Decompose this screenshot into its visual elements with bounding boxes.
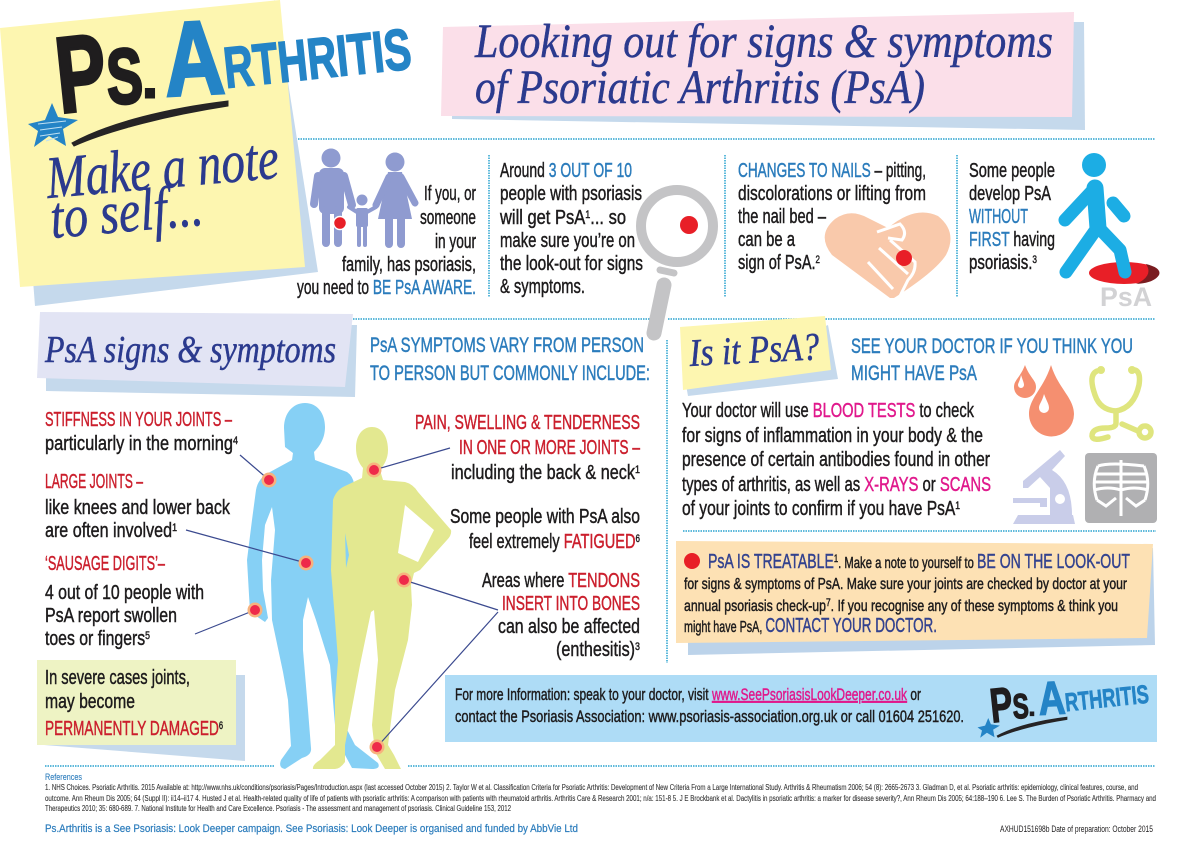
- text block: left symptoms: 4 out of 10 people with: [45, 582, 204, 604]
- text block: left symptoms: toes or fingers: [45, 628, 172, 650]
- logo: small Ps. Arthritis: S: [1012, 687, 1030, 726]
- callout: PsA is treatable: BE ON THE LOOK-OUT: [977, 551, 1130, 573]
- logo: Ps. Arthritis: S: [104, 31, 145, 121]
- joint markers: [248, 462, 412, 754]
- connector lines: [186, 448, 498, 747]
- references: [45, 772, 1156, 813]
- callout: permanently damaged: In severe cases joints,: [45, 667, 190, 689]
- subheading: symptoms vary: [370, 334, 650, 385]
- subheading: see your doctor: MIGHT HAVE PsA: [851, 362, 977, 385]
- text: 3 out of 10: Around 3 OUT OF 10: [500, 160, 632, 182]
- text: without first: WITHOUT: [969, 206, 1028, 228]
- text: without first: FIRST having: [969, 229, 1055, 251]
- icon: chest x-ray: [1085, 453, 1157, 523]
- text: be PsA aware: in your: [435, 231, 476, 253]
- callout: PsA is treatable: 7: [826, 597, 831, 609]
- text: without first: 3: [1032, 254, 1037, 266]
- callout: PsA is treatable: . Make a note to yourself to: [838, 555, 977, 572]
- heading: is it PsA: [680, 316, 838, 396]
- text block: doctor tests: types of arthritis, as well as X-RAYS or SCANS: [682, 474, 991, 496]
- callout: PsA is treatable: . If you recognise any of these symptoms & think you: [831, 598, 1118, 615]
- callout: PsA is treatable: 1: [834, 553, 838, 565]
- text block: doctor tests: Your doctor will use BLOOD TESTS to check: [682, 400, 975, 422]
- text block: doctor tests: of your joints to confirm if you have PsA: [682, 498, 1033, 520]
- subheading: see your doctor: [851, 335, 1133, 385]
- logo: Ps. Arthritis: P: [50, 10, 112, 136]
- text: 3 out of 10: people with psoriasis: [500, 183, 642, 205]
- text block: right symptoms: 1: [635, 464, 640, 476]
- logo: small Ps. Arthritis: [978, 672, 1150, 738]
- text block: left symptoms: like knees and lower back: [45, 497, 231, 519]
- text: changes to nails: can be a: [738, 229, 796, 251]
- text: changes to nails: sign of PsA.: [738, 252, 845, 274]
- callout: permanently damaged: PERMANENTLY DAMAGED: [45, 718, 219, 740]
- text block: left symptoms: particularly in the morning: [45, 433, 274, 455]
- text block: right symptoms: 3: [635, 641, 640, 653]
- panel: changes to nails: [738, 160, 950, 298]
- callout: PsA is treatable: [676, 541, 1155, 655]
- text: be PsA aware: someone: [420, 207, 476, 229]
- text block: doctor tests: for signs of inflammation in your body & the: [682, 425, 983, 447]
- text block: left symptoms: 5: [145, 630, 150, 642]
- logo: small Ps. Arthritis: .: [1029, 695, 1035, 720]
- chart: body figures with joint markers: [186, 403, 498, 769]
- heading: is it PsA: Is it PsA?: [687, 325, 821, 375]
- logo: small Ps. Arthritis: A: [1037, 672, 1067, 725]
- text block: left symptoms: are often involved: [45, 520, 203, 542]
- icon: hands heart: [825, 212, 950, 298]
- text: changes to nails: CHANGES TO NAILS – pitting,: [738, 160, 926, 182]
- text: be PsA aware: [297, 183, 476, 299]
- panel: more information: [445, 672, 1157, 742]
- icon: family: [314, 148, 415, 245]
- text block: right symptoms: IN ONE OR MORE JOINTS –: [459, 437, 641, 459]
- text: 3 out of 10: ... so: [590, 207, 626, 229]
- banner: looking out for signs and symptoms: Looking out for signs & symptoms: [474, 15, 1053, 68]
- text block: right symptoms: PAIN, SWELLING & TENDERNESS: [415, 412, 640, 434]
- text: 3 out of 10: & symptoms.: [500, 276, 585, 298]
- logo: Ps. Arthritis: RTHRITIS: [221, 17, 414, 101]
- text block: right symptoms: can also be affected: [498, 616, 640, 638]
- heading: PsA signs and symptoms: [37, 312, 357, 397]
- callout: PsA is treatable: PsA IS TREATABLE: [708, 551, 834, 573]
- text block: right symptoms: Areas where TENDONS: [482, 570, 640, 592]
- panel: family awareness: [297, 148, 476, 299]
- text: 3 out of 10: make sure you’re on: [500, 230, 635, 252]
- panel: more information: contact the Psoriasis Association: www.psoriasis-association.org.uk or call 01604 251620.: [455, 707, 964, 726]
- text: 3 out of 10: 1: [585, 209, 590, 221]
- text: changes to nails: 2: [816, 254, 820, 266]
- panel: yellow note with logo: [0, 0, 414, 306]
- icon: microscope: [1013, 450, 1075, 524]
- text: be PsA aware: If you, or: [424, 183, 476, 205]
- icon: stethoscope: [1092, 368, 1151, 439]
- heading: make a note to self: Make a note: [43, 125, 281, 211]
- icon: blood drops: [1014, 365, 1074, 436]
- logo: Ps. Arthritis: A: [161, 0, 227, 119]
- text: changes to nails: discolorations or lifting from: [738, 183, 926, 205]
- subheading: symptoms vary: TO PERSON BUT COMMONLY INCLUDE:: [370, 362, 650, 385]
- references: References: [45, 772, 82, 782]
- text block: left symptoms: [45, 409, 238, 650]
- figure: man: [247, 403, 379, 769]
- references: Therapeutics 2010; 35: 680-689. 7. National Institute for Health and Care Excellence. Psoriasis - The assessment and management of psoriasis. Clinical Guideline 153, 2012: [45, 804, 511, 813]
- icon: walking person into hole: PsA: [1100, 282, 1152, 312]
- text block: left symptoms: PsA report swollen: [45, 605, 177, 627]
- logo: small Ps. Arthritis: P: [987, 677, 1015, 733]
- text: without first: psoriasis.: [969, 252, 1053, 274]
- text: without first: develop PsA: [969, 183, 1051, 205]
- logo: small Ps. Arthritis: RTHRITIS: [1064, 681, 1150, 717]
- footer: date of preparation: AXHUD151698b Date of preparation: October 2015: [1000, 824, 1153, 834]
- icon: walking person into hole: [1065, 153, 1159, 312]
- heading: make a note to self: to self...: [47, 172, 206, 251]
- text: be PsA aware: you need to BE PsA AWARE.: [297, 277, 476, 299]
- callout: PsA is treatable: annual psoriasis check-up: [684, 598, 869, 615]
- text: 3 out of 10: the look-out for signs: [500, 253, 643, 275]
- text: 3 out of 10: [499, 160, 643, 298]
- text block: right symptoms: Some people with PsA also: [450, 506, 640, 528]
- footer: campaign note: Ps.Arthritis is a See Psoriasis: Look Deeper campaign. See Psoriasis: Look Deeper is organised and funded by AbbVie Ltd: [45, 823, 578, 835]
- text: changes to nails: the nail bed –: [738, 206, 827, 228]
- callout: permanently damaged: 6: [219, 720, 223, 732]
- logo: Ps. Arthritis: [28, 0, 414, 147]
- text block: left symptoms: 4: [233, 435, 238, 447]
- text block: right symptoms: feel extremely FATIGUED: [469, 531, 662, 553]
- text block: right symptoms: [415, 412, 641, 661]
- text: 3 out of 10: will get PsA: [500, 207, 603, 229]
- panel: more information: For more Information: speak to your doctor, visit www.SeePsoriasisLookDeeper.co.uk or: [455, 685, 921, 704]
- figure: woman: [313, 427, 451, 769]
- text block: doctor tests: 1: [955, 500, 960, 512]
- text: changes to nails: [738, 160, 926, 274]
- text: without first: [969, 160, 1055, 274]
- heading: make a note to self: [43, 125, 281, 251]
- heading: PsA signs and symptoms: PsA signs & symptoms: [44, 329, 336, 371]
- text: be PsA aware: family, has psoriasis,: [342, 254, 476, 276]
- subheading: symptoms vary: PsA SYMPTOMS VARY FROM PERSON: [370, 334, 644, 357]
- text block: right symptoms: (enthesitis): [556, 639, 654, 661]
- logo: Ps. Arthritis: .: [143, 52, 157, 108]
- text block: right symptoms: 6: [636, 533, 640, 545]
- banner: looking out for signs and symptoms: of Psoriatic Arthritis (PsA): [475, 61, 925, 114]
- panel: 3 out of 10: [499, 160, 713, 333]
- text block: right symptoms: INSERT INTO BONES: [502, 593, 640, 615]
- text block: left symptoms: LARGE JOINTS –: [45, 471, 144, 493]
- text block: doctor tests: [682, 400, 991, 520]
- banner: looking out for signs and symptoms: [441, 12, 1085, 130]
- icon: magnifying glass: [641, 190, 713, 333]
- callout: permanently damaged: [37, 660, 245, 761]
- text block: left symptoms: 1: [172, 522, 177, 534]
- callout: PsA is treatable: might have PsA, CONTACT YOUR DOCTOR.: [684, 615, 937, 637]
- text block: doctor tests: presence of certain antibodies found in other: [682, 449, 990, 471]
- text block: left symptoms: ‘SAUSAGE DIGITS’–: [45, 553, 166, 575]
- text block: right symptoms: including the back & neck: [451, 462, 678, 484]
- text block: left symptoms: STIFFNESS IN YOUR JOINTS –: [45, 409, 233, 431]
- panel: without first having psoriasis: [969, 153, 1159, 312]
- callout: permanently damaged: may become: [45, 691, 135, 713]
- text: without first: Some people: [969, 160, 1055, 182]
